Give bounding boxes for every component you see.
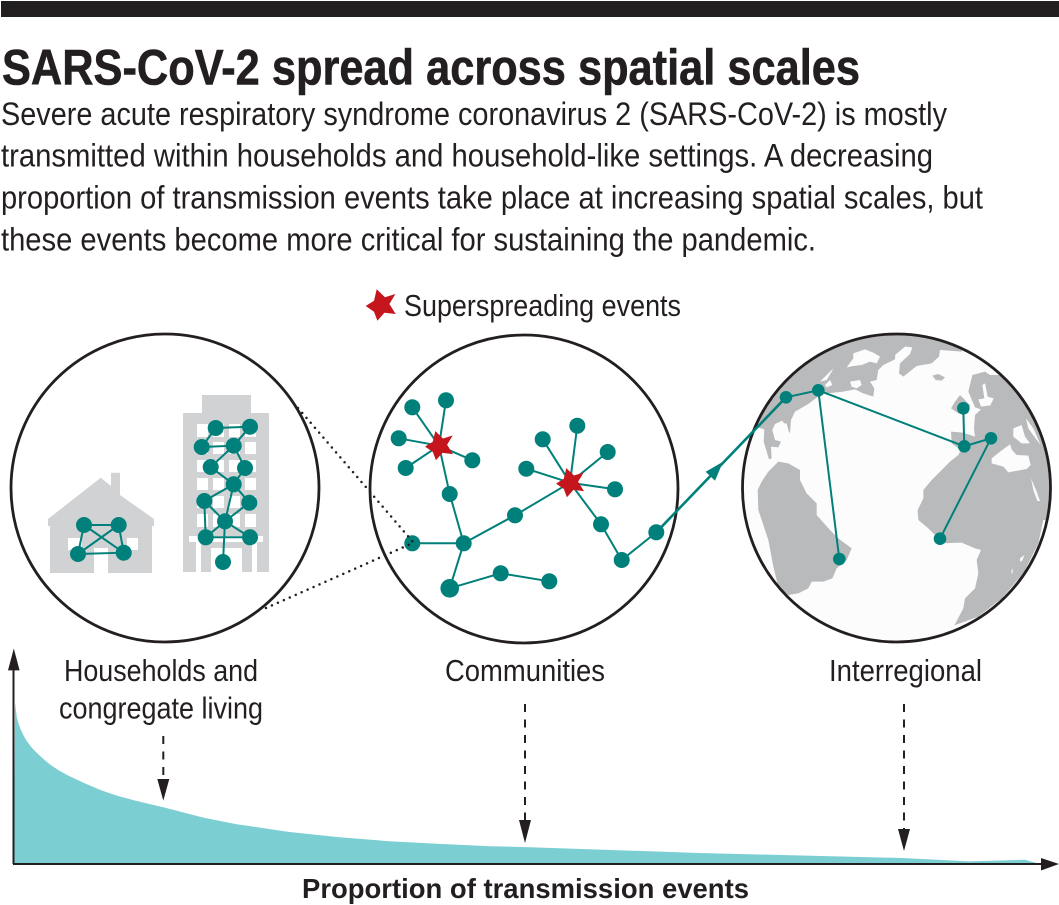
dashed arrow: interregional xyxy=(898,704,910,851)
icon: superspreader star 2 xyxy=(556,468,584,497)
label: households: Households and xyxy=(64,653,258,688)
dashed arrow: households xyxy=(157,736,169,801)
north america xyxy=(758,336,896,460)
icon: superspreader star 1 xyxy=(425,431,453,460)
area chart: transmission distribution xyxy=(14,702,1040,864)
world map xyxy=(745,330,1059,625)
icon: house xyxy=(48,473,154,573)
intro text: Severe acute respiratory syndrome coronavirus 2 (SARS-CoV-2) is mostly xyxy=(1,96,947,132)
legend: superspreading events: Superspreading events xyxy=(404,288,681,323)
intro text: proportion of transmission events take place at increasing spatial scales, but xyxy=(1,180,983,216)
greenland and arctic xyxy=(893,330,970,413)
chart axes xyxy=(8,648,1059,870)
top bar xyxy=(1,1,1059,17)
intro text xyxy=(1,96,983,258)
globe network xyxy=(780,384,997,565)
panel: households circle xyxy=(11,334,319,642)
panel: interregional globe xyxy=(742,330,1059,642)
intro text: transmitted within households and household-like settings. A decreasing xyxy=(1,138,933,174)
label: households: congregate living xyxy=(59,690,263,725)
eurasia and africa xyxy=(918,372,1059,625)
intro text: these events become more critical for sustaining the pandemic. xyxy=(1,222,816,258)
dashed arrow: communities xyxy=(519,704,531,843)
icon: apartment building xyxy=(183,395,269,572)
globe outline xyxy=(742,334,1050,642)
arrow: communities to interregional xyxy=(656,397,786,532)
label: interregional: Interregional xyxy=(829,653,982,688)
transmission network xyxy=(391,392,664,598)
label: communities: Communities xyxy=(445,653,605,688)
panel: communities circle xyxy=(370,335,678,643)
mediterranean and inland seas xyxy=(992,418,1040,501)
x axis label: Proportion of transmission events xyxy=(302,873,749,904)
title: SARS-CoV-2 spread across spatial scales xyxy=(2,40,860,96)
label: households xyxy=(59,653,263,725)
dotted zoom lines xyxy=(266,408,413,608)
south america xyxy=(758,462,852,595)
